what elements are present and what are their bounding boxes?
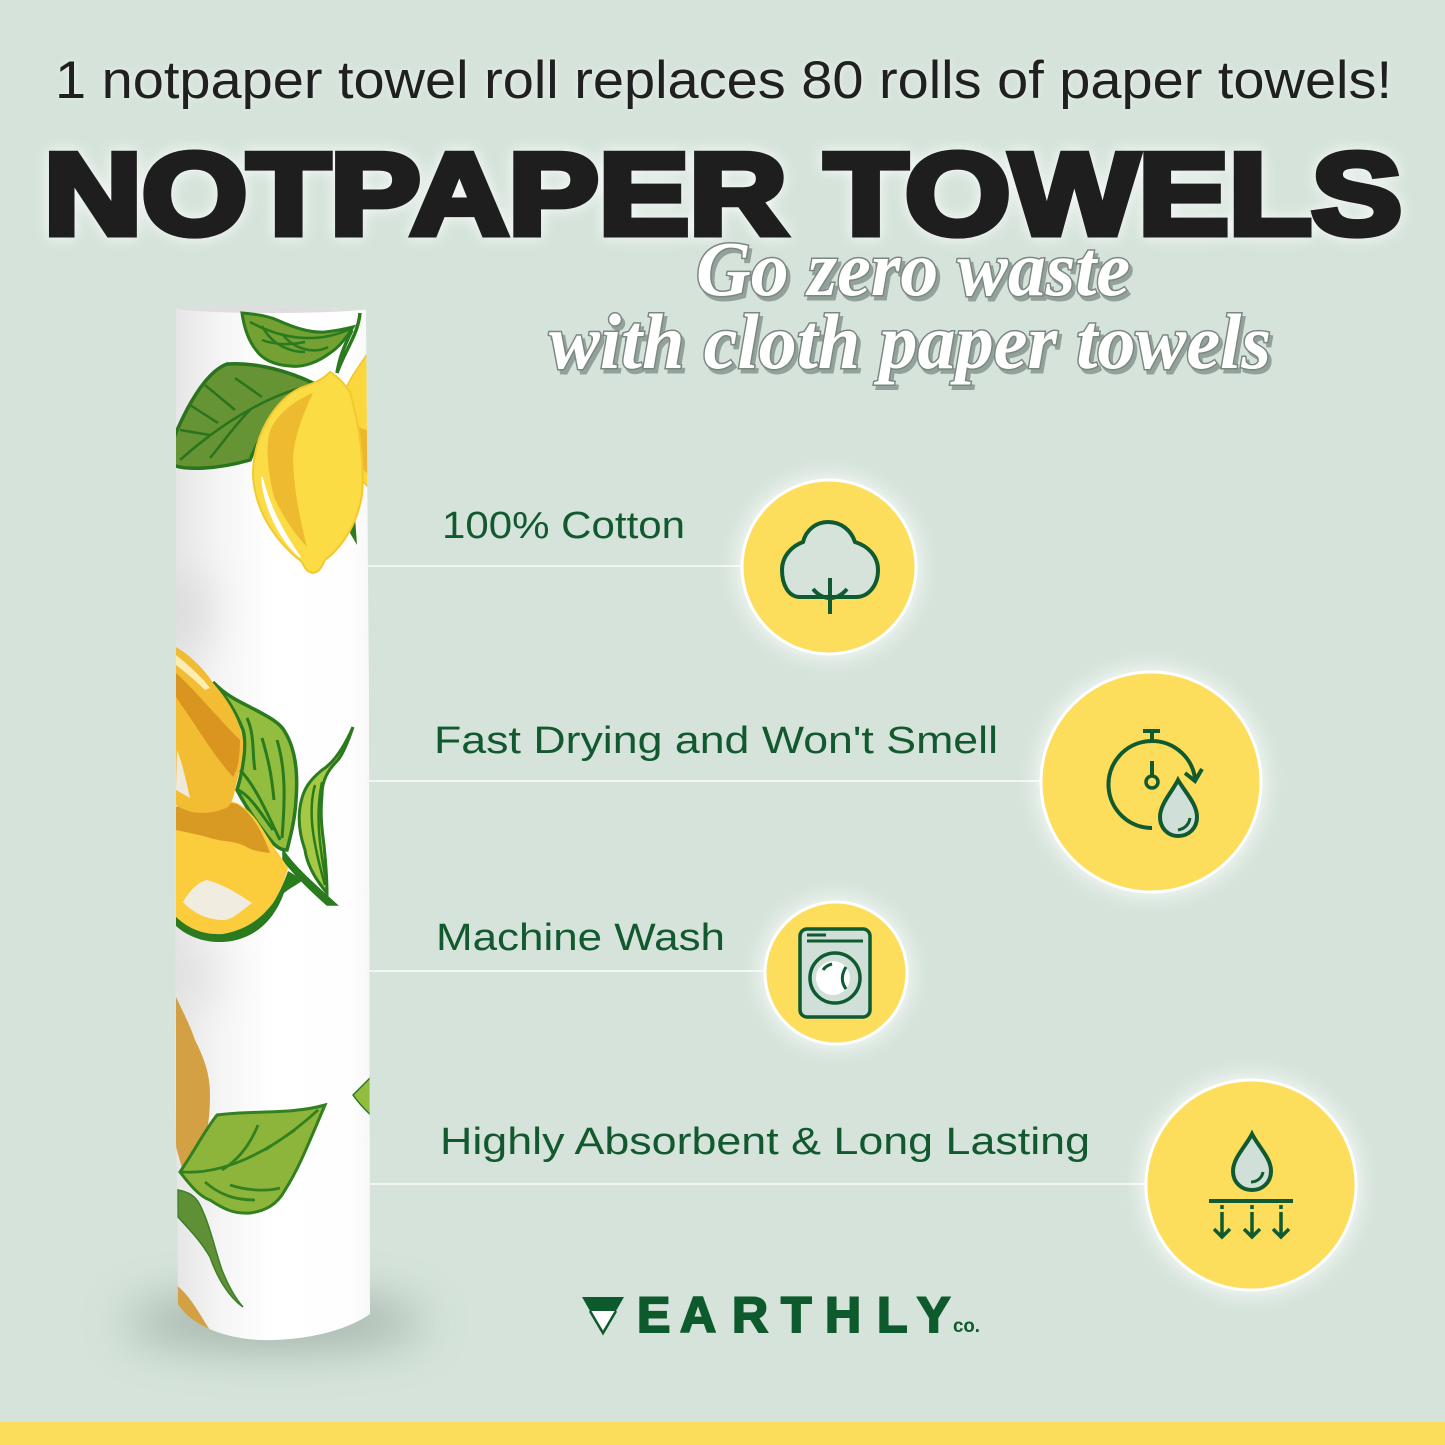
- right edge leaf: [353, 1076, 372, 1116]
- script subtitle: Go zero waste: [699, 229, 1133, 316]
- logo: Earthly Co: E: [637, 1287, 670, 1343]
- logo: Earthly Co: A: [680, 1287, 716, 1343]
- logo: Earthly Co: H: [825, 1287, 861, 1343]
- stem: [337, 313, 360, 373]
- lemon B: [176, 800, 288, 934]
- logo: Earthly Co: co.: [953, 1316, 980, 1337]
- script subtitle: [549, 225, 1274, 389]
- bottom yellow band: [0, 1422, 1445, 1445]
- icon: cotton: [737, 475, 921, 659]
- bottom lemon D: [178, 1286, 210, 1329]
- label: machine wash: Machine Wash: [436, 917, 725, 959]
- main title: NOTPAPER TOWELS: [44, 129, 1402, 259]
- small leaf under lemon: [350, 521, 357, 545]
- lemon main: [253, 372, 363, 573]
- roll top edge: [176, 306, 361, 313]
- logo: Earthly Co: [582, 1287, 980, 1343]
- logo: Earthly Co: L: [877, 1287, 908, 1343]
- script subtitle: with cloth paper towels: [552, 302, 1274, 389]
- label: absorbent: Highly Absorbent & Long Lasting: [440, 1121, 1090, 1163]
- script subtitle: Go zero waste: [696, 225, 1130, 312]
- logo: Earthly Co: R: [732, 1287, 768, 1343]
- large leaf upper: [173, 364, 313, 468]
- middle stem: [283, 850, 337, 905]
- paper towel roll with lemon print: [175, 306, 370, 1340]
- roll shadow: [125, 1298, 425, 1346]
- upper leaf: [242, 313, 353, 366]
- connector lines: [366, 566, 1149, 1184]
- logo: Earthly Co: T: [781, 1287, 812, 1343]
- green crescent below middle lemon: [176, 871, 303, 942]
- logo: Earthly Co: Y: [917, 1287, 950, 1343]
- soft shadow overlays: [176, 588, 210, 632]
- top tagline: 1 notpaper towel roll replaces 80 rolls of paper towels!: [55, 51, 1392, 110]
- lower slim leaf: [178, 1190, 243, 1307]
- icon: absorbent drop: [1141, 1075, 1361, 1295]
- script subtitle: with cloth paper towels: [549, 298, 1271, 385]
- label: fast drying: Fast Drying and Won't Smell: [434, 720, 998, 762]
- bottom leaf: [180, 1105, 325, 1213]
- lemon right: [346, 354, 368, 487]
- label: 100% Cotton: 100% Cotton: [442, 505, 685, 547]
- bottom lemon C: [176, 997, 210, 1168]
- main title: NOTPAPER TOWELS: [44, 129, 1402, 259]
- icon: washing machine: [760, 897, 912, 1049]
- middle large leaf: [213, 682, 297, 850]
- icon: fast drying timer: [1036, 667, 1266, 897]
- middle small leaf: [299, 727, 353, 893]
- lemon A: [176, 647, 243, 813]
- top tagline: 1 notpaper towel roll replaces 80 rolls of paper towels!: [55, 51, 1392, 110]
